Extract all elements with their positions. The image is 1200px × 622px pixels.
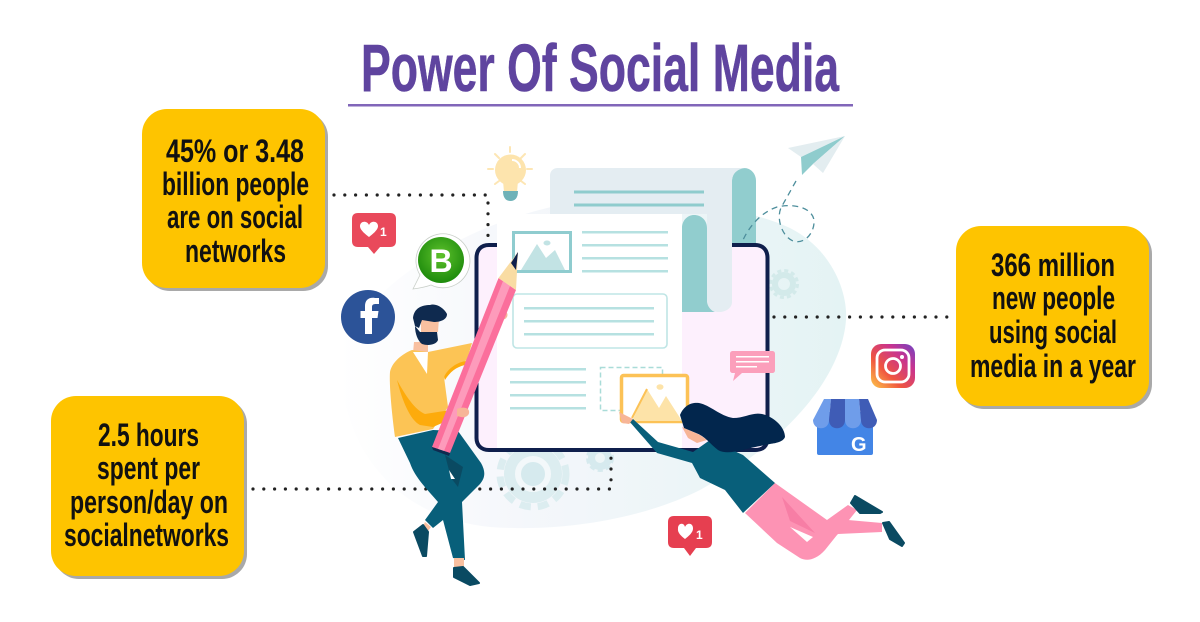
background blob bbox=[339, 199, 846, 528]
callout: 366 million: media in a year bbox=[970, 348, 1136, 384]
icon: google my business bbox=[813, 399, 877, 456]
yellow picture frame bbox=[622, 376, 688, 422]
scroll curl bbox=[732, 168, 756, 246]
rear hand bbox=[498, 310, 508, 320]
callout: 45 percent: networks bbox=[185, 233, 286, 269]
connector: right bbox=[774, 315, 951, 319]
callout: 366 million: using social bbox=[989, 314, 1117, 350]
hair bbox=[680, 403, 785, 452]
title underline bbox=[348, 104, 853, 106]
woman illustration bbox=[619, 403, 904, 560]
title: Power Of Social Media bbox=[361, 31, 839, 106]
callout: 2.5 hours bbox=[51, 396, 247, 579]
icon: instagram bbox=[871, 344, 915, 388]
icon: google my business: G bbox=[851, 434, 867, 456]
text card bbox=[513, 294, 667, 348]
connector: top left bbox=[334, 195, 488, 240]
hand bbox=[619, 412, 633, 424]
upper leg bbox=[745, 483, 857, 560]
picture frame bbox=[514, 232, 570, 272]
icon: whatsapp business bbox=[413, 234, 470, 289]
callout: 2.5 hours: socialnetworks bbox=[64, 517, 229, 553]
gear: right bbox=[770, 270, 798, 298]
sweater bbox=[629, 419, 775, 513]
face bbox=[682, 427, 707, 443]
icon: like badge top bbox=[352, 213, 396, 254]
back paper bbox=[550, 168, 745, 312]
sweater bbox=[390, 343, 472, 437]
shoes bbox=[414, 525, 479, 585]
lower leg bbox=[825, 520, 882, 545]
callout: 366 million: new people bbox=[992, 280, 1115, 316]
man illustration bbox=[390, 252, 518, 585]
front paper bbox=[497, 214, 715, 448]
callout: 45 percent: are on social bbox=[167, 199, 303, 235]
callout: 2.5 hours: 2.5 hours bbox=[98, 417, 199, 453]
connector: bottom left bbox=[253, 454, 611, 489]
gear: lower large bbox=[500, 441, 566, 507]
pencil bbox=[432, 252, 518, 456]
trousers bbox=[398, 430, 484, 560]
plane dashed trail bbox=[743, 181, 814, 242]
dashed placeholder bbox=[600, 368, 662, 410]
icon: chat bubble bbox=[730, 351, 775, 381]
icon: like badge bottom: 1 bbox=[696, 528, 703, 542]
shoes bbox=[851, 496, 904, 546]
tablet frame bbox=[476, 245, 768, 450]
callout: 2.5 hours: person/day on bbox=[70, 484, 228, 520]
hair bbox=[413, 305, 447, 328]
beard bbox=[415, 326, 438, 345]
callout: 45 percent: billion people bbox=[162, 166, 309, 202]
callout: 45 percent bbox=[142, 109, 328, 291]
icon: like badge bottom bbox=[668, 516, 712, 556]
icon: light bulb bbox=[488, 147, 532, 201]
sleeve shade bbox=[397, 380, 458, 427]
face bbox=[421, 318, 439, 334]
front hand bbox=[457, 408, 469, 417]
callout: 366 million: 366 million bbox=[991, 247, 1115, 283]
paper text lines bbox=[582, 231, 668, 272]
icon: facebook bbox=[341, 290, 395, 344]
icon: paper plane bbox=[788, 136, 845, 175]
callout: 45 percent: 45% or 3.48 bbox=[166, 133, 304, 169]
lower text lines bbox=[510, 368, 586, 410]
icon: like badge top: 1 bbox=[380, 225, 387, 239]
neck bbox=[413, 342, 428, 354]
trouser fold bbox=[445, 455, 463, 487]
shirt collar bbox=[413, 352, 428, 374]
icon: whatsapp business: B bbox=[430, 243, 453, 279]
callout: 2.5 hours: spent per bbox=[97, 450, 200, 486]
callout: 366 million bbox=[956, 226, 1152, 409]
gear: lower small bbox=[588, 446, 612, 470]
ankles bbox=[423, 522, 464, 567]
